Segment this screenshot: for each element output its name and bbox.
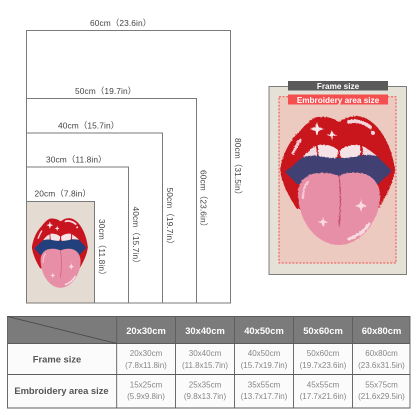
column headers: 30x40cm xyxy=(185,325,225,336)
row: frame size: 50x60cm xyxy=(307,349,340,358)
row: embroidery area size: (13.7x17.7in) xyxy=(241,392,288,401)
height label 60cm: 60cm（23.6in） xyxy=(198,170,208,231)
row: frame size: 60x80cm xyxy=(365,349,398,358)
height label 50cm: 50cm（19.7in） xyxy=(165,188,175,249)
frame size tag xyxy=(288,81,388,91)
icon: lips and tongue xyxy=(280,116,395,245)
row: embroidery area size: Embroidery area size xyxy=(14,385,109,396)
frame size tag: Frame size xyxy=(317,82,360,91)
size table xyxy=(8,316,410,408)
width label 60cm: 60cm（23.6in） xyxy=(90,18,151,28)
row: embroidery area size: 45x55cm xyxy=(307,380,340,390)
frame xyxy=(269,86,406,274)
large framed artwork xyxy=(269,86,406,274)
row: frame size: 40x50cm xyxy=(248,349,281,358)
row: frame size: 20x30cm xyxy=(130,349,163,358)
size outline: 50x60cm xyxy=(26,98,196,303)
embroidery area size tag: Embroidery area size xyxy=(297,96,380,105)
row: embroidery area size: (17.7x21.6in) xyxy=(300,392,347,401)
row: frame size: (7.8x11.8in) xyxy=(125,361,167,370)
row: frame size: (11.8x15.7in) xyxy=(182,361,228,370)
width label 50cm: 50cm（19.7in） xyxy=(75,86,136,96)
row: frame size xyxy=(33,349,405,370)
row: embroidery area size: 25x35cm xyxy=(189,380,222,390)
table header row xyxy=(8,316,410,344)
column headers xyxy=(126,325,401,336)
row: frame size: (15.7x19.7in) xyxy=(241,361,288,370)
column headers: 50x60cm xyxy=(303,325,343,336)
height label 30cm: 30cm（11.8in） xyxy=(97,219,107,280)
size outline: 40x50cm xyxy=(26,133,162,303)
row: embroidery area size: 35x55cm xyxy=(248,380,281,390)
embroidery area xyxy=(279,97,396,263)
column headers: 40x50cm xyxy=(244,325,284,336)
row: embroidery area size: 55x75cm xyxy=(365,380,398,390)
column headers: 60x80cm xyxy=(362,325,401,336)
row: embroidery area size: (5.9x9.8in) xyxy=(127,392,165,401)
row: embroidery area size: (9.8x13.7in) xyxy=(184,392,226,401)
row: frame size: 30x40cm xyxy=(189,349,222,358)
width label 30cm: 30cm（11.8in） xyxy=(46,154,107,164)
row: frame size: (23.6x31.5in) xyxy=(358,361,405,370)
row: embroidery area size: (21.6x29.5in) xyxy=(358,392,405,401)
row: embroidery area size: 15x25cm xyxy=(130,380,163,390)
height label 80cm: 80cm（31.5in） xyxy=(233,138,243,199)
size outline: 60x80cm xyxy=(26,30,230,303)
row: frame size: (19.7x23.6in) xyxy=(300,361,347,370)
column headers: 20x30cm xyxy=(126,325,166,336)
row: frame size: Frame size xyxy=(33,354,81,364)
small framed artwork 20x30cm xyxy=(26,202,94,303)
width label 20cm: 20cm（7.8in） xyxy=(34,188,91,198)
row: embroidery area size xyxy=(14,380,405,401)
size outline: 30x40cm xyxy=(26,167,128,303)
width label 40cm: 40cm（15.7in） xyxy=(58,120,119,130)
height label 40cm: 40cm（15.7in） xyxy=(131,206,141,268)
table body xyxy=(8,344,410,408)
